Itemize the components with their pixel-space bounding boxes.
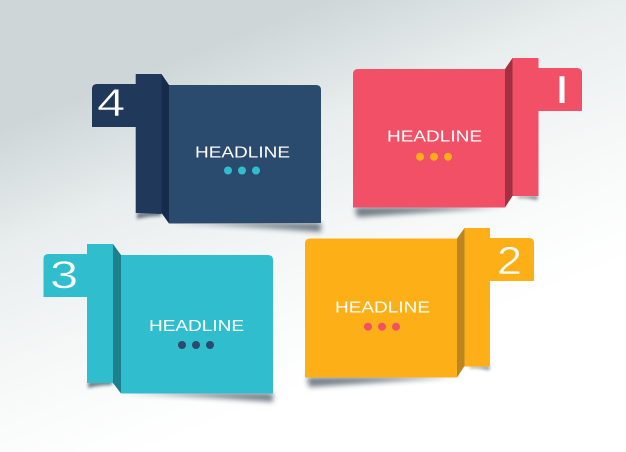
- tab and flap: panel 3: [44, 244, 113, 383]
- shadow: panel 1: [355, 196, 538, 217]
- dots: panel 2: [364, 323, 400, 331]
- number 2: 2: [497, 239, 522, 282]
- panel 4: navy: [92, 74, 321, 232]
- dots: panel 3: [178, 341, 214, 349]
- number 3: 3: [50, 253, 78, 297]
- main card: panel 2: [305, 238, 457, 378]
- fold: panel 2: [457, 228, 464, 378]
- fold: panel 3: [113, 244, 121, 394]
- shadow: panel 3: [88, 380, 273, 402]
- dots: panel 4: [224, 166, 260, 174]
- tab and flap: panel 2: [464, 228, 534, 366]
- headline: panel 2: HEADLINE: [335, 300, 430, 317]
- headline: panel 1: HEADLINE: [387, 129, 482, 146]
- shadow: panel 2: [307, 366, 490, 387]
- panel 1: red: [353, 58, 582, 217]
- tab and flap: panel 4: [92, 74, 162, 214]
- headline: panel 4: HEADLINE: [195, 145, 290, 162]
- headline: panel 3: HEADLINE: [149, 318, 244, 335]
- tab and flap: panel 1: [512, 58, 582, 196]
- main card: panel 3: [121, 255, 273, 394]
- number 4: 4: [97, 81, 125, 125]
- panel 2: yellow: [305, 228, 534, 387]
- number 1: 1: [543, 69, 578, 112]
- main card: panel 4: [169, 85, 321, 224]
- dots: panel 1: [416, 153, 452, 161]
- main card: panel 1: [353, 69, 505, 208]
- fold: panel 1: [505, 58, 512, 208]
- fold: panel 4: [162, 74, 169, 224]
- panel 3: teal: [44, 244, 273, 402]
- shadow: panel 4: [137, 211, 321, 232]
